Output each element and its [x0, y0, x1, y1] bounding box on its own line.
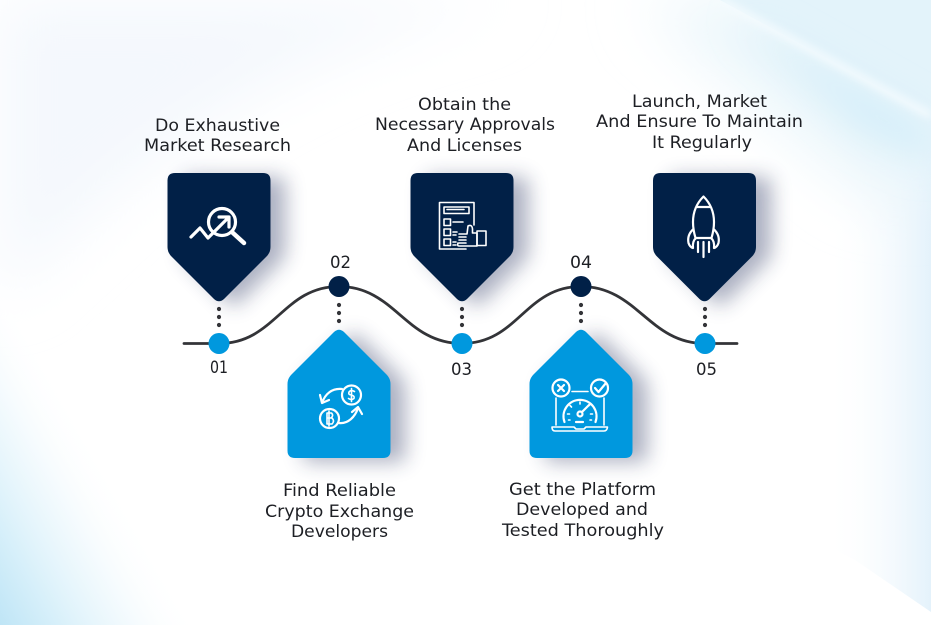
step 05 shield shadow — [668, 177, 772, 305]
number 05: 05 — [696, 359, 717, 379]
dotted connector 02 — [337, 303, 341, 323]
step 01 title — [144, 115, 291, 155]
number 02: 02 — [330, 252, 351, 272]
dotted connector 04 — [579, 303, 583, 323]
dotted connector 01 — [217, 307, 221, 327]
number 03: 03 — [451, 359, 472, 379]
step 01 title: Market Research — [144, 135, 291, 155]
step 03 title: And Licenses — [407, 135, 522, 155]
step 02 title: Crypto Exchange — [265, 501, 414, 521]
number 04: 04 — [570, 252, 592, 272]
step 02 title: Find Reliable — [283, 480, 396, 500]
step 05 title — [596, 91, 803, 152]
step 04 title: Tested Thoroughly — [501, 520, 664, 540]
step 02 title: Developers — [291, 521, 388, 541]
icon: checklist with thumbs up — [440, 202, 486, 249]
dotted connector 03 — [460, 307, 464, 327]
step 02 house shadow — [302, 334, 406, 462]
step 01 shield — [168, 173, 270, 301]
step 05 title: Launch, Market — [632, 91, 767, 111]
step 02 title — [265, 480, 414, 541]
step 03 title — [375, 94, 555, 155]
wave timeline — [184, 286, 737, 344]
step 02 — [265, 252, 414, 541]
icon: magnifier with rising chart — [191, 208, 244, 243]
node 03 — [452, 333, 472, 354]
step 01 — [144, 115, 291, 377]
step 04 house shadow — [544, 334, 648, 462]
step 03 title: Necessary Approvals — [375, 114, 555, 134]
step 03 shield — [410, 173, 514, 301]
node 01 — [208, 333, 230, 354]
icon: crypto exchange — [320, 386, 362, 428]
step 01 title: Do Exhaustive — [155, 115, 280, 135]
node 05 — [694, 333, 716, 354]
step 05 title: And Ensure To Maintain — [596, 111, 803, 131]
step 05 — [596, 91, 803, 379]
step 05 shield — [653, 173, 756, 301]
step 01 shield shadow — [182, 177, 286, 305]
icon: laptop speed test — [552, 380, 608, 431]
step 04 — [501, 252, 664, 540]
step 04 title: Get the Platform — [509, 479, 656, 499]
step 03 shield shadow — [426, 177, 528, 305]
icon: rocket — [688, 196, 719, 257]
dotted connector 05 — [703, 307, 707, 327]
step 03 — [375, 94, 555, 379]
node 04 — [570, 276, 592, 297]
step 02 house — [288, 330, 390, 458]
step 04 title: Developed and — [516, 499, 648, 519]
step 05 title: It Regularly — [652, 132, 752, 152]
node 02 — [328, 276, 350, 297]
step 04 house — [530, 330, 632, 458]
step 04 title — [501, 479, 664, 540]
step 03 title: Obtain the — [418, 94, 511, 114]
number 01: 01 — [210, 357, 228, 377]
